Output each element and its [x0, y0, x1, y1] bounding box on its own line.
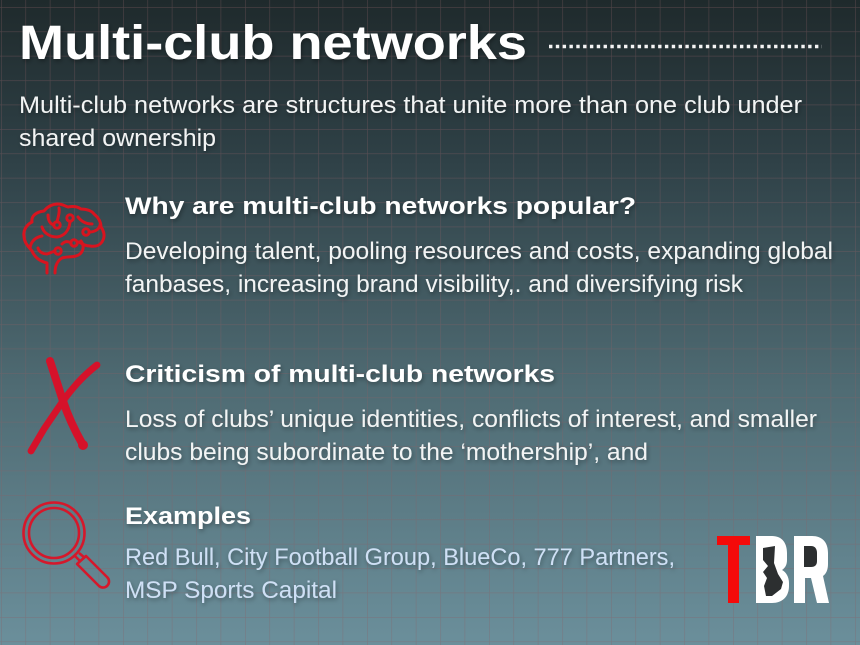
text: criticism: Loss of clubs’ unique identities, conflicts of interest, and smaller [125, 406, 817, 433]
heading: why popular: Why are multi-club networks popular? [125, 193, 636, 220]
text: why popular: Developing talent, pooling resources and costs, expanding global [125, 238, 833, 265]
logo: TBR [717, 536, 829, 603]
text: examples: MSP Sports Capital [125, 577, 337, 604]
text: criticism: clubs being subordinate to the ‘mothership’, and [125, 439, 648, 466]
text: why popular [125, 238, 833, 298]
text: examples: Red Bull, City Football Group, BlueCo, 777 Partners, [125, 544, 675, 571]
title: Multi-club networks [19, 17, 527, 70]
heading: criticism: Criticism of multi-club networks [125, 361, 555, 388]
text: criticism [125, 406, 817, 466]
icon: red cross [31, 361, 97, 451]
intro text: shared ownership [19, 125, 216, 152]
intro text [19, 92, 802, 152]
icon: magnifying glass [24, 502, 109, 588]
intro text: Multi-club networks are structures that unite more than one club under [19, 92, 802, 119]
text: examples [125, 544, 675, 604]
text: why popular: fanbases, increasing brand visibility,. and diversifying risk [125, 271, 744, 298]
heading: examples: Examples [125, 503, 251, 530]
icon: brain [24, 204, 104, 273]
dotted title rule [549, 45, 822, 48]
